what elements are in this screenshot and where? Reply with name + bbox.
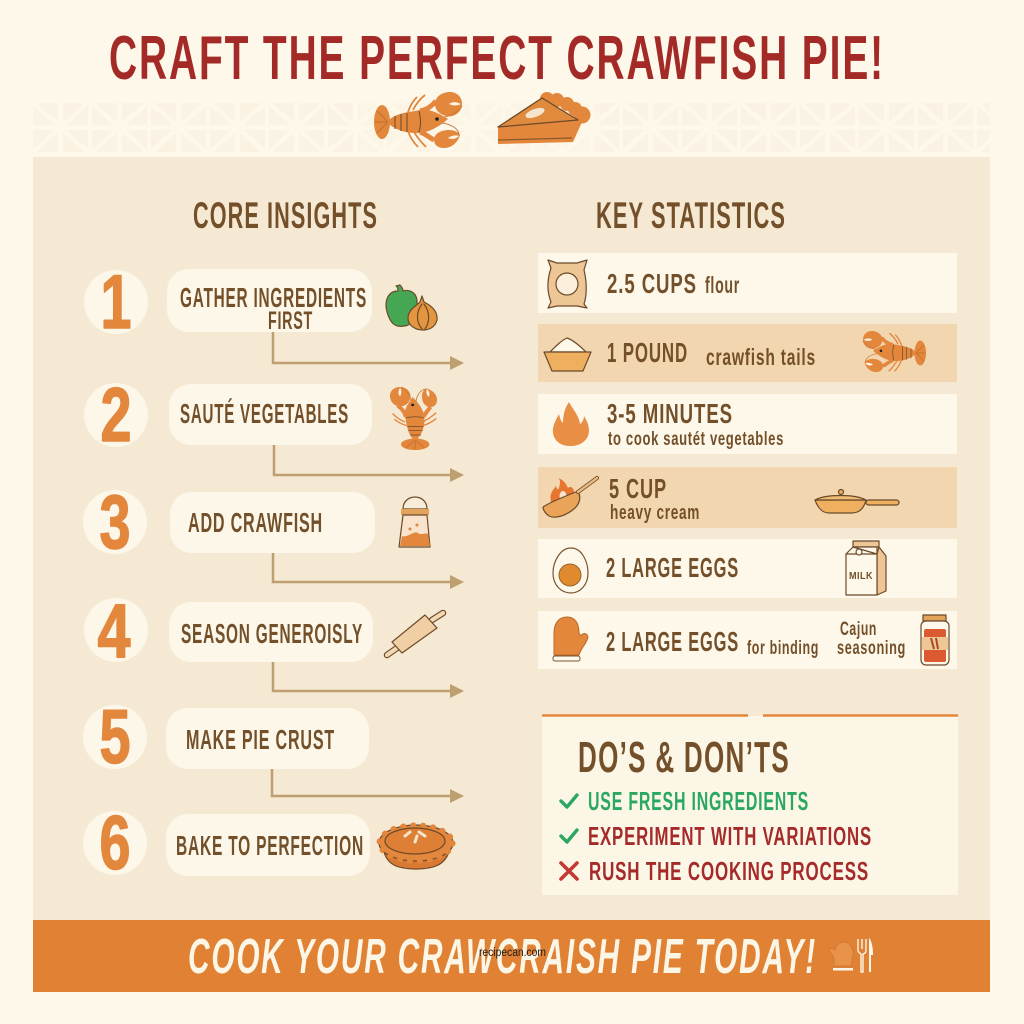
stat row 3: minutes: to cook sautét vegetables [608,429,784,450]
icon: pepper and onion [386,285,437,330]
icon: whole pie [379,825,453,869]
stat row 2: crawfish tails: crawfish tails [706,344,816,370]
stat row 4: heavy cream: 5 CUP [609,473,667,504]
step 4 [84,589,464,698]
step 1: 1 [100,260,132,345]
stat row 3: minutes [538,394,957,454]
stat row 5: eggs: 2 LARGE EGGS [606,552,739,583]
step 5 [83,695,464,803]
stat row 3: minutes: 3-5 MINUTES [607,398,733,429]
icon: frying pan [815,490,899,513]
step 2: 2 [100,373,132,458]
icon: rolling pin [387,613,443,655]
icon: salt shaker [399,497,430,547]
heading: key statistics: KEY STATISTICS [596,195,786,236]
main panel [33,157,990,920]
icon: flour sack [548,260,587,308]
panel: do's and don'ts [542,716,958,895]
do item 2: EXPERIMENT WITH VARIATIONS [588,821,872,851]
heading: core insights: CORE INSIGHTS [193,195,378,236]
stat row 6: eggs for binding and seasoning [538,611,957,669]
stat row 2: crawfish tails [538,324,957,382]
icon: crawfish [863,331,926,372]
step 2 [84,373,464,482]
do item 2 [561,821,872,851]
icon: mitt, fork and knife [829,938,873,972]
icon: oven mitt [553,617,588,661]
step 3: ADD CRAWFISH [188,507,323,538]
step 3 [83,480,464,589]
do item 1: USE FRESH INGREDIENTS [588,786,809,816]
stat row 1: flour [538,253,957,313]
icon: crawfish upright [390,387,437,450]
watermark: recipecan.com [479,947,546,959]
step 2: SAUTÉ VEGETABLES [180,398,349,429]
icon: pan with flames [543,478,597,517]
stat row 6: eggs for binding and seasoning: for binding [747,638,819,659]
stat row 5: eggs [538,539,957,598]
step 5: MAKE PIE CRUST [186,724,335,755]
arrow 3 [273,553,452,582]
stat row 6: eggs for binding and seasoning: Cajun [840,619,877,640]
icon: pie slice header [498,92,590,144]
stat row 4: heavy cream: heavy cream [610,502,700,524]
do item 1 [561,786,809,816]
step 4: 4 [98,589,130,674]
step 5: 5 [100,695,130,780]
step 1 [84,260,464,370]
decorative pattern band [33,103,990,153]
stat row 4: heavy cream [538,467,957,528]
icon: milk carton [846,541,886,595]
stat row 1: flour: 2.5 CUPS [607,268,697,299]
step 1: GATHER INGREDIENTS [180,282,367,313]
arrow 2 [274,445,452,475]
step 3: 3 [100,480,130,565]
stat row 6: eggs for binding and seasoning: seasoning [837,638,906,659]
stat row 6: eggs for binding and seasoning: 2 LARGE EGGS [606,626,739,657]
arrow 4 [273,662,452,691]
arrow 1 [273,332,452,363]
footer banner [33,920,990,992]
icon: bowl of flour [544,338,591,371]
step 6: 6 [100,801,130,886]
step 6: BAKE TO PERFECTION [176,830,364,861]
don't item: RUSH THE COOKING PROCESS [589,856,869,886]
icon: seasoning jar [921,615,949,665]
icon: flame [553,402,589,446]
heading: do's and don'ts: DO’S & DON’TS [578,733,790,782]
step 4: SEASON GENEROISLY [181,618,363,649]
icon: milk carton: MILK [849,571,873,582]
icon: crawfish header [374,92,462,148]
don't item [561,856,869,886]
arrow 5 [272,769,452,796]
icon: egg [553,548,588,593]
step 1: FIRST [268,307,313,335]
step 6 [83,801,453,886]
stat row 2: crawfish tails: 1 POUND [607,337,688,368]
stat row 1: flour: flour [705,272,740,298]
